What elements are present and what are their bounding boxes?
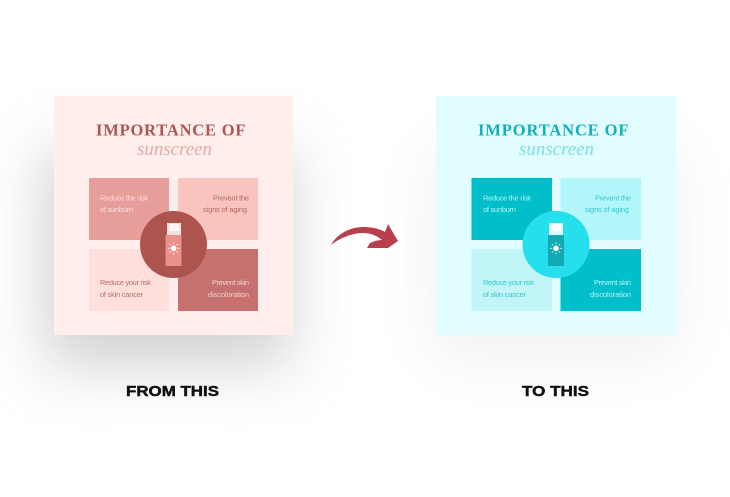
script heading: sunscreen: sunscreen <box>519 139 594 160</box>
card: skin cancer: Reduce your risk <box>100 278 151 287</box>
card: skin cancer: of skin cancer <box>100 290 144 299</box>
card: skin cancer <box>472 249 552 311</box>
card: discoloration <box>178 249 258 311</box>
card: reduce sunburn <box>472 178 552 240</box>
caption: from this: FROM THIS <box>126 384 219 400</box>
card: skin cancer: of skin cancer <box>483 290 527 299</box>
card: discoloration: Prevent skin <box>212 278 249 287</box>
script heading: sunscreen: sunscreen <box>137 139 212 160</box>
panel shadow: right <box>435 150 675 355</box>
icon: sunscreen bottle in circle <box>522 211 590 278</box>
heading: importance of: IMPORTANCE OF <box>96 120 246 140</box>
card: skin cancer <box>89 249 169 311</box>
card: prevent aging: Prevent the <box>213 194 249 202</box>
card: prevent aging: signs of aging <box>203 205 247 214</box>
icon: sunscreen bottle in circle <box>140 211 207 278</box>
panel shadow: left <box>45 150 290 365</box>
card: discoloration: discoloration <box>590 290 631 299</box>
card: reduce sunburn: of sunburn <box>100 205 133 214</box>
card: discoloration <box>560 249 641 311</box>
arrow <box>331 224 398 248</box>
card: reduce sunburn: Reduce the risk <box>483 194 531 202</box>
caption: to this: TO THIS <box>522 384 589 400</box>
card: discoloration: Prevent skin <box>594 278 631 287</box>
card: reduce sunburn: Reduce the risk <box>100 194 148 202</box>
heading: importance of: IMPORTANCE OF <box>478 120 628 140</box>
card: prevent aging <box>178 178 258 240</box>
card: reduce sunburn <box>89 178 169 240</box>
card: prevent aging: signs of aging <box>585 205 629 214</box>
card: skin cancer: Reduce your risk <box>483 278 534 287</box>
card: discoloration: discoloration <box>208 290 249 299</box>
card: reduce sunburn: of sunburn <box>483 205 516 214</box>
card: prevent aging: Prevent the <box>595 194 631 202</box>
card: prevent aging <box>560 178 641 240</box>
panel: to this (teal) <box>436 96 676 335</box>
panel: from this (pink) <box>54 96 293 335</box>
